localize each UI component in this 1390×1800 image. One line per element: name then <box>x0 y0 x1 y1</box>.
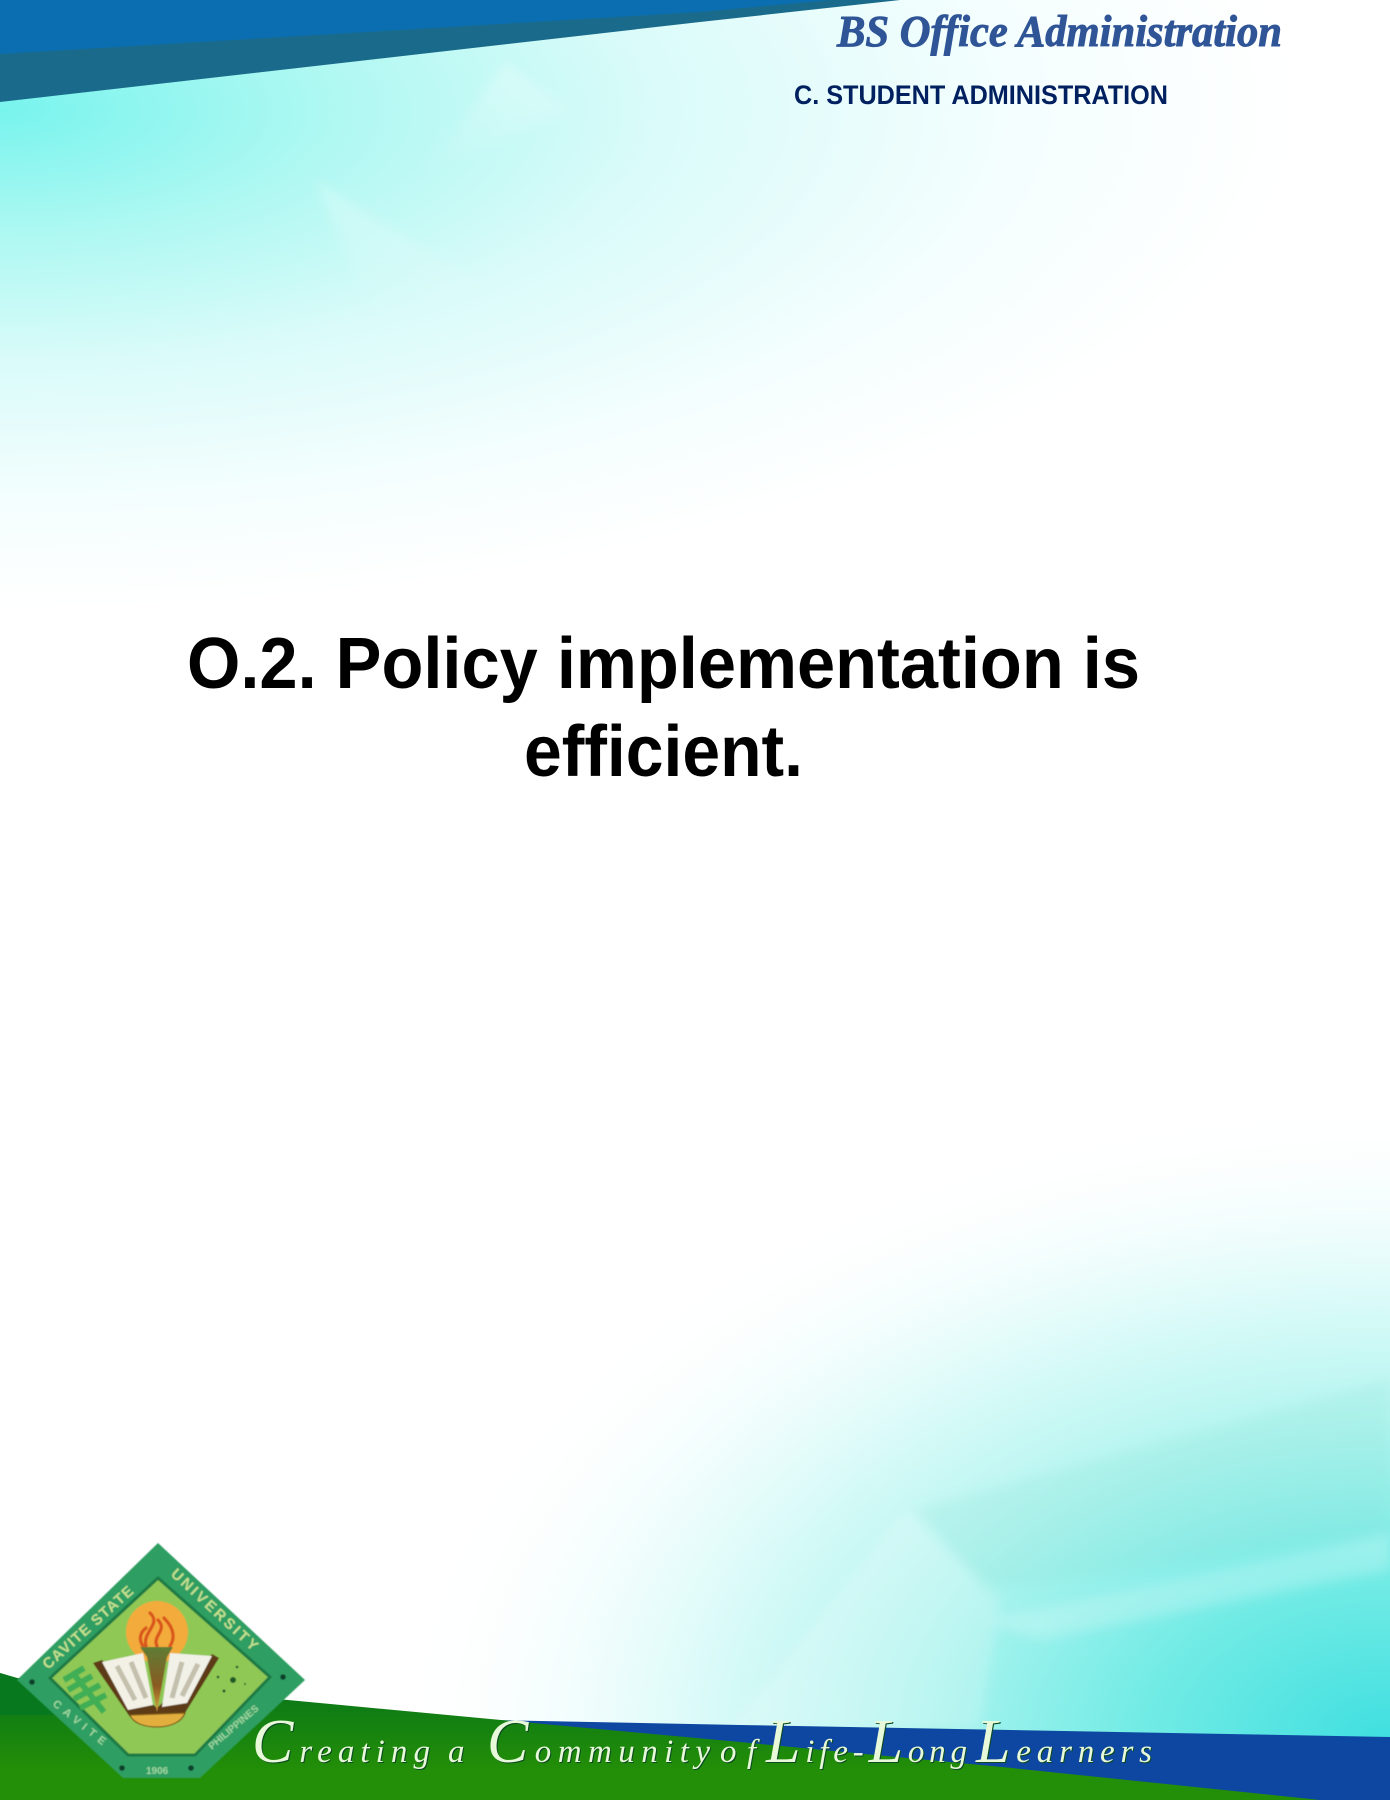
logo: gear <box>130 1713 185 1727</box>
tagline: Life-Long <box>765 1708 967 1776</box>
logo: wheat <box>64 1668 106 1712</box>
tagline: Creating <box>252 1708 430 1776</box>
footer band: blue and green <box>0 1673 1390 1800</box>
logo: Cavite State University seal <box>16 1542 306 1778</box>
header: program name: BS Office Administration <box>836 7 1282 56</box>
title: O.2. Policy implementation is <box>187 624 1140 704</box>
header: section name: C. STUDENT ADMINISTRATION <box>794 80 1168 110</box>
logo: flame <box>140 1613 173 1646</box>
top banner <box>0 0 900 102</box>
tagline: Community <box>487 1708 710 1776</box>
logo: seal lettering: CAVITE <box>53 1700 107 1746</box>
tagline <box>252 1708 1152 1776</box>
background: bottom-right cyan wash <box>0 1090 1390 1800</box>
background: top-left cyan wash <box>0 0 1390 640</box>
logo: inner diamond <box>50 1578 270 1755</box>
background: light facets <box>315 62 1390 1730</box>
logo: torch <box>140 1647 173 1712</box>
tagline: Learners <box>975 1708 1152 1776</box>
tagline: of <box>720 1734 760 1770</box>
logo: seal lettering: CAVITE STATE <box>42 1584 135 1669</box>
title: efficient. <box>524 712 803 792</box>
logo: seal lettering: PHILIPPINES <box>208 1704 259 1750</box>
logo: corner dots <box>29 1674 286 1771</box>
logo: atom dots <box>217 1666 246 1692</box>
title <box>187 624 1140 792</box>
logo: seal lettering: 1906 <box>146 1766 169 1777</box>
logo: sun <box>126 1601 188 1663</box>
logo: seal lettering: UNIVERSITY <box>171 1567 260 1650</box>
logo: outer diamond <box>17 1543 305 1778</box>
logo: open book <box>93 1654 219 1717</box>
logo: seal lettering <box>42 1567 260 1777</box>
tagline: a <box>448 1734 464 1770</box>
